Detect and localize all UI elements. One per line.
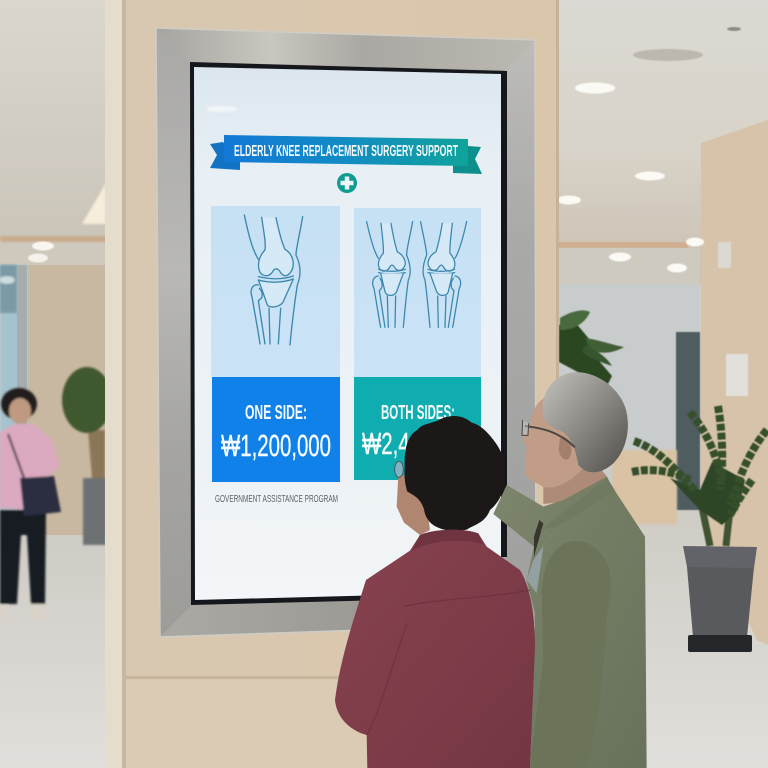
background: hospital lobby right side [556,0,768,768]
background plant, upper right behind man [559,310,624,384]
metal frame of the display [156,28,536,637]
callout: both sides price [354,377,481,480]
panel: two knees illustration [354,208,481,377]
display screen [194,67,501,600]
potted plant, right [632,406,767,652]
man in olive shirt [493,372,647,768]
program note: GOVERNMENT ASSISTANCE PROGRAM [215,493,338,505]
title text: ELDERLY KNEE REPLACEMENT SURGERY SUPPORT [234,143,458,160]
woman's hair [404,416,505,531]
callout: one side price: ₩1,200,000 [221,428,331,463]
icon: right knee joint [421,222,467,327]
woman's face [397,475,430,535]
callout: both sides price: BOTH SIDES: [381,402,455,424]
icon: single knee joint [244,215,303,345]
panel: one knee illustration [211,206,340,377]
title ribbon [210,135,482,174]
man's shirt [493,477,647,768]
man's head and neck [522,372,628,504]
icon: left knee joint [367,222,413,327]
woman's glasses [395,461,403,477]
woman's jacket [335,530,535,768]
background plant behind pillar, left [62,367,112,545]
callout: both sides price: ₩2,400,000 [362,426,472,461]
woman in burgundy jacket [335,416,535,768]
background: hospital lobby left side [0,0,110,768]
callout: one side price [212,377,340,482]
pillar [105,0,559,768]
icon: medical plus [337,173,357,193]
callout: one side price: ONE SIDE: [245,402,307,424]
background person with handbag [0,388,61,621]
